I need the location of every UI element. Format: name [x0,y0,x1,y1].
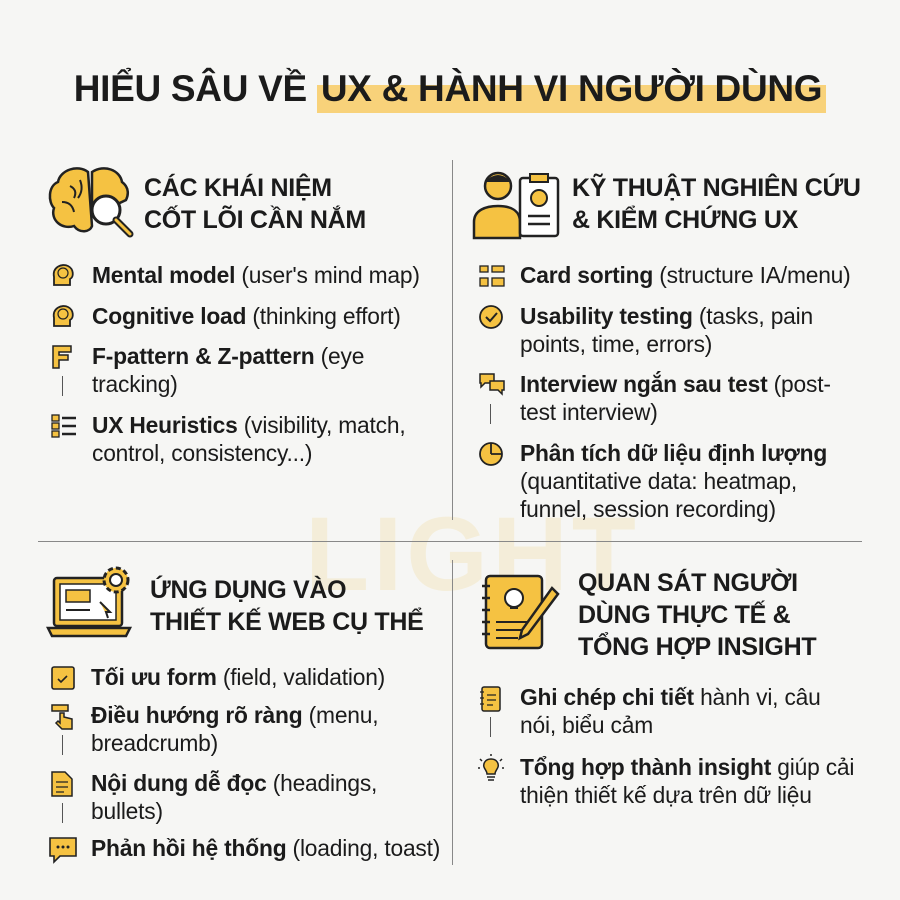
heading [144,174,366,234]
item: usability testing: points, time, errors) [520,331,712,357]
heading: CÁC KHÁI NIỆM [144,174,332,202]
item: card sorting: Card sorting (structure IA/menu) [520,262,851,288]
item: navigation: breadcrumb) [91,730,218,756]
item: notes [480,684,821,738]
item: cognitive load: Cognitive load (thinking effort) [92,303,401,329]
title: HIỂU SÂU VỀ UX & HÀNH VI NGƯỜI DÙNG [74,68,822,109]
watermark: LIGHT [305,496,640,613]
item: feedback: Phản hồi hệ thống (loading, toast) [91,835,440,861]
item: readable content [51,770,377,824]
heading: THIẾT KẾ WEB CỤ THỂ [150,608,423,636]
panel: core concepts [48,167,420,466]
item: f-pattern: tracking) [92,371,178,397]
panel: web design application [46,566,440,864]
icon: notebook with pen [482,574,560,650]
panel: research techniques [472,172,861,522]
item: usability testing: Usability testing (tasks, pain [520,303,813,329]
item: interview: Interview ngắn sau test (post- [520,371,831,397]
item: f-pattern: F-pattern & Z-pattern (eye [92,343,364,369]
item: quantitative: funnel, session recording) [520,496,776,522]
icon: brain magnifier [48,167,134,238]
item: quantitative: (quantitative data: heatmap, [520,468,797,494]
heading: QUAN SÁT NGƯỜI [578,569,798,597]
heading: KỸ THUẬT NGHIÊN CỨU [572,174,861,202]
heading: & KIỂM CHỨNG UX [572,206,798,234]
item: mental model: Mental model (user's mind map) [92,262,420,288]
heading: TỔNG HỢP INSIGHT [578,633,816,661]
icon: laptop with gear [46,566,132,638]
item: interview [479,371,831,425]
item: insight: Tổng hợp thành insight giúp cải [520,754,854,780]
item: readable content: bullets) [91,798,163,824]
item: heuristics [51,412,406,466]
item: interview: test interview) [520,399,658,425]
item: heuristics: control, consistency...) [92,440,312,466]
heading: CỐT LÕI CẦN NẮM [144,206,366,234]
icon: person with clipboard [472,172,560,240]
item: navigation [51,702,378,756]
heading [572,174,861,234]
item: f-pattern [52,343,364,397]
item: quantitative [479,440,827,522]
item: notes: Ghi chép chi tiết hành vi, câu [520,684,821,710]
item: notes: nói, biểu cảm [520,712,653,738]
item: heuristics: UX Heuristics (visibility, match, [92,412,406,438]
heading: DÙNG THỰC TẾ & [578,601,790,629]
item: usability testing [479,303,813,357]
item: navigation: Điều hướng rõ ràng (menu, [91,702,378,728]
item: insight: thiện thiết kế dựa trên dữ liệu [520,782,812,808]
item: quantitative: Phân tích dữ liệu định lượng [520,440,827,466]
item: form: Tối ưu form (field, validation) [91,664,385,690]
item: readable content: Nội dung dễ đọc (headings, [91,770,377,796]
panel: observation & insight [478,568,854,808]
heading [150,576,423,636]
heading: ỨNG DỤNG VÀO [150,576,346,604]
item: insight [478,754,854,808]
heading [578,568,816,661]
